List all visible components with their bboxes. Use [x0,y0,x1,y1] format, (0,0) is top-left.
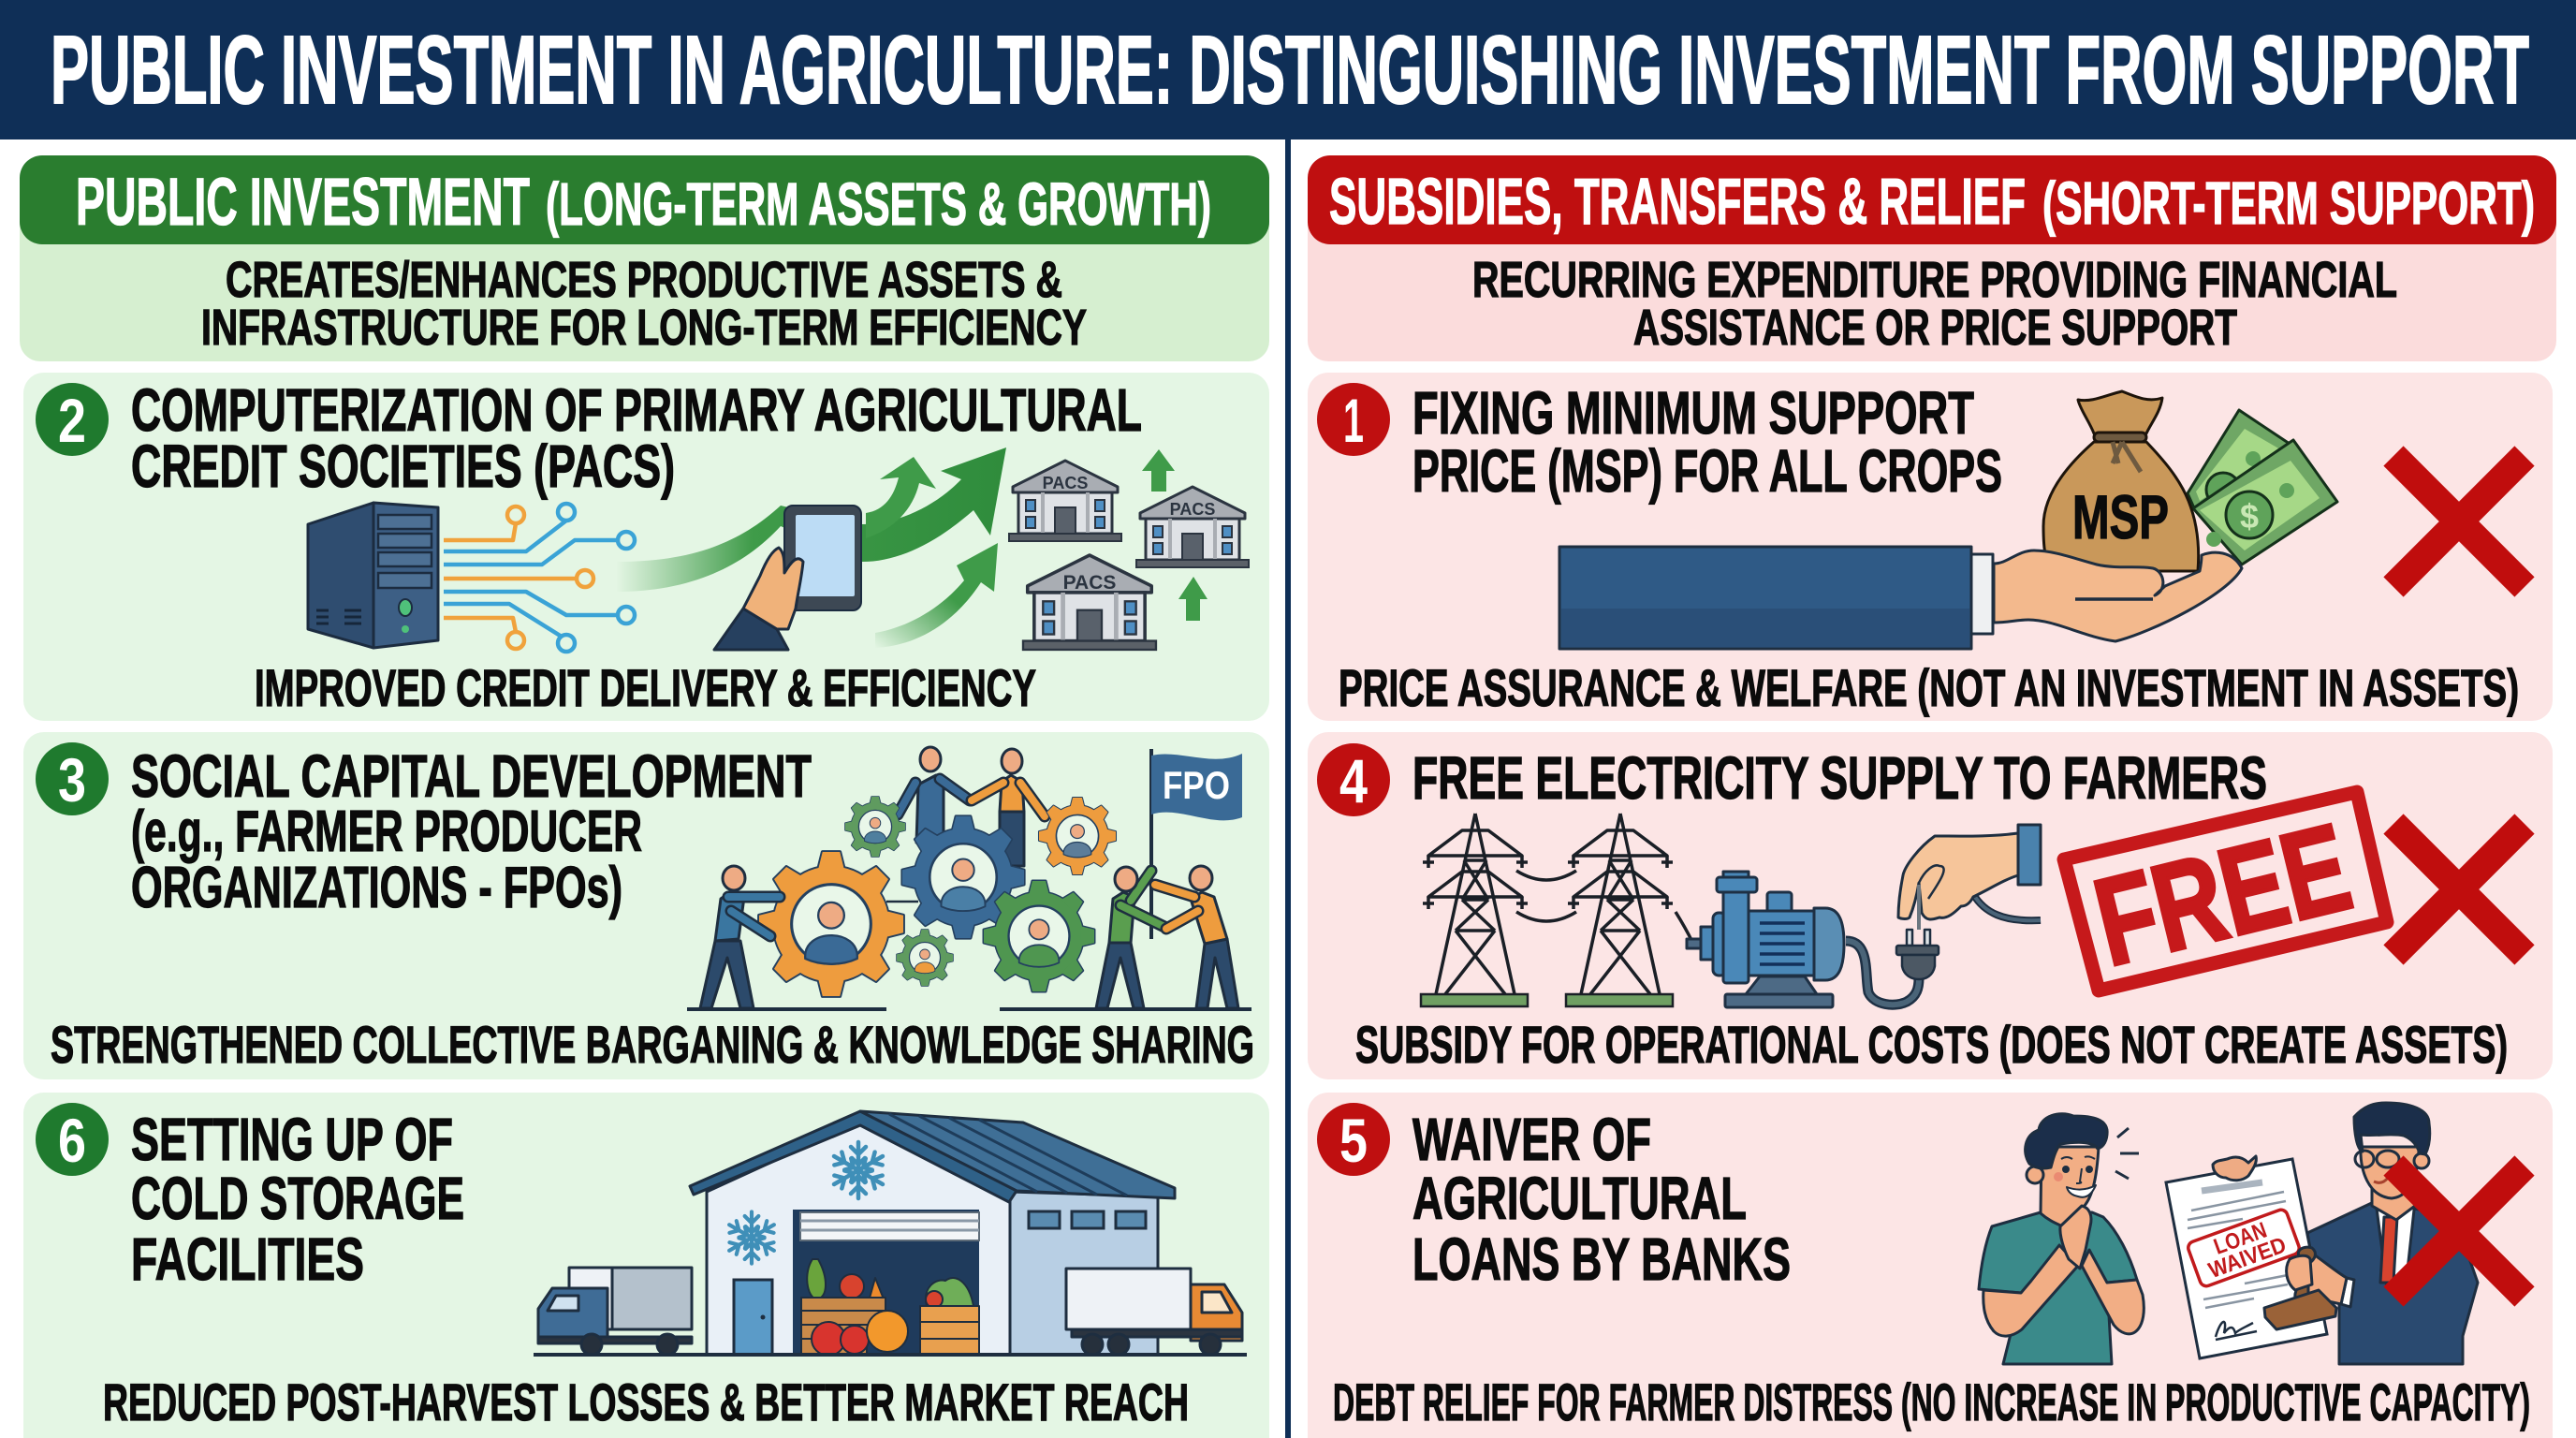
heading [131,376,1142,500]
icon: water pump [1687,872,1919,1007]
badge 3: 3 [58,745,86,814]
icon: PACS building 2 [1136,487,1249,567]
stamp: FREE: FREE [2083,798,2363,991]
badge 3 [36,742,109,815]
badge 6 [36,1103,109,1176]
panel: item 1 MSP [1308,373,2553,721]
truck left [538,1268,692,1355]
gear: blue [902,816,1024,938]
truck right [1066,1269,1242,1355]
illustration: people and gears [687,747,1251,1009]
heading: CREDIT SOCIETIES (PACS) [131,433,675,500]
people right [1096,866,1238,1008]
heading: FIXING MINIMUM SUPPORT [1412,379,1974,447]
gear: big orange [759,852,903,996]
icon: banknotes: $ [2240,497,2259,536]
panel: item 5 loan waiver [1308,1093,2553,1438]
gear: green [984,881,1094,991]
panel: public investment header [20,155,1269,361]
icon: hand holding phone [714,506,861,650]
panel: public investment header: PUBLIC INVESTMENT [76,166,530,240]
icon: hand and sleeve [1559,547,2242,649]
arrow: up 2 [1178,577,1208,621]
icon: pylon 2 [1566,814,1673,1006]
panel: subsidies header: SUBSIDIES, TRANSFERS & RELIEF [1329,165,2026,238]
icon: red cross [2393,824,2525,955]
panel: item 4 free electricity [1308,732,2553,1079]
icon: server tower [308,503,438,648]
person left [700,866,780,1008]
heading: (e.g., FARMER PRODUCER [131,800,642,864]
arrow: main growth sweep [616,448,1006,592]
icon: circuit lines [444,504,635,652]
heading: PRICE (MSP) FOR ALL CROPS [1412,437,2002,505]
illustration: relieved farmer [1979,1114,2144,1364]
arrow: lower growth sweep [875,543,998,648]
badge 1: 1 [1343,386,1364,455]
panel: public investment header: INFRASTRUCTURE FOR LONG-TERM EFFICIENCY [201,300,1087,356]
panel: public investment header: CREATES/ENHANCES PRODUCTIVE ASSETS & [226,252,1062,308]
heading: FACILITIES [131,1225,364,1293]
badge 4: 4 [1339,746,1368,815]
icon: banknotes [2188,410,2337,565]
heading [1412,379,2002,505]
gear: small orange [1039,798,1116,874]
produce crates [801,1259,979,1356]
bag label: MSP [2072,482,2169,551]
illustration: bank officer [2307,1103,2478,1364]
arrow: up 1 [1142,449,1175,492]
icon: PACS building 2: PACS [1170,500,1215,519]
illustration: loan waived document [2166,1156,2327,1358]
outcome text: IMPROVED CREDIT DELIVERY & EFFICIENCY [255,658,1036,717]
icon: hand with plug cable [1898,825,2041,930]
panel: subsidies header [1308,155,2556,361]
badge 2 [36,383,109,456]
wires [1516,871,1692,942]
heading: SOCIAL CAPITAL DEVELOPMENT [131,742,812,810]
icon: PACS building 1 [1009,461,1121,541]
flag: FPO [1163,763,1230,807]
panel: item 3 social capital [23,732,1269,1079]
illustration: loan waived document: WAIVED [2205,1232,2290,1284]
icon: red cross [2393,456,2525,587]
panel: item 6 cold storage [23,1093,1269,1438]
panel: public investment header: (LONG-TERM ASSETS & GROWTH) [546,170,1211,238]
badge 5 [1317,1103,1390,1176]
icon: money bag [2043,391,2199,571]
arrow: upper growth sweep [866,457,936,538]
heading: WAIVER OF [1412,1106,1651,1173]
outcome text: REDUCED POST-HARVEST LOSSES & BETTER MARKET REACH [103,1372,1189,1431]
badge 2: 2 [58,386,86,455]
icon: rubber stamp [2264,1247,2354,1329]
panel: subsidies header: ASSISTANCE OR PRICE SUPPORT [1633,300,2237,356]
badge 1 [1317,383,1390,456]
illustration: cold storage warehouse [534,1111,1247,1356]
icon: PACS building 1: PACS [1043,474,1088,492]
icon: plug [1896,930,1939,979]
heading: ORGANIZATIONS - FPOs) [131,856,622,920]
heading [131,742,812,920]
outcome text: STRENGTHENED COLLECTIVE BARGANING & KNOWLEDGE SHARING [51,1015,1254,1074]
illustration: loan waived document: LOAN [2211,1218,2270,1260]
badge 5: 5 [1339,1106,1368,1175]
icon: pylon 1 [1421,814,1528,1006]
center divider [1285,139,1291,1438]
heading: AGRICULTURAL [1412,1165,1747,1232]
badge 6: 6 [58,1106,86,1175]
heading: COMPUTERIZATION OF PRIMARY AGRICULTURAL [131,376,1142,444]
top people [898,747,1045,866]
flag [1151,749,1242,939]
gear: small green [845,797,905,857]
icon: red cross [2393,1166,2525,1297]
heading: COLD STORAGE [131,1165,464,1232]
heading [1412,1106,1791,1293]
heading [131,1106,464,1293]
heading: SETTING UP OF [131,1106,453,1173]
heading: LOANS BY BANKS [1412,1225,1791,1293]
icon: PACS building 3: PACS [1063,572,1116,594]
icon: PACS building 3 [1023,555,1156,650]
gear: small bottom [897,930,953,986]
badge 4 [1317,743,1390,816]
panel: item 2 PACS [23,373,1269,721]
